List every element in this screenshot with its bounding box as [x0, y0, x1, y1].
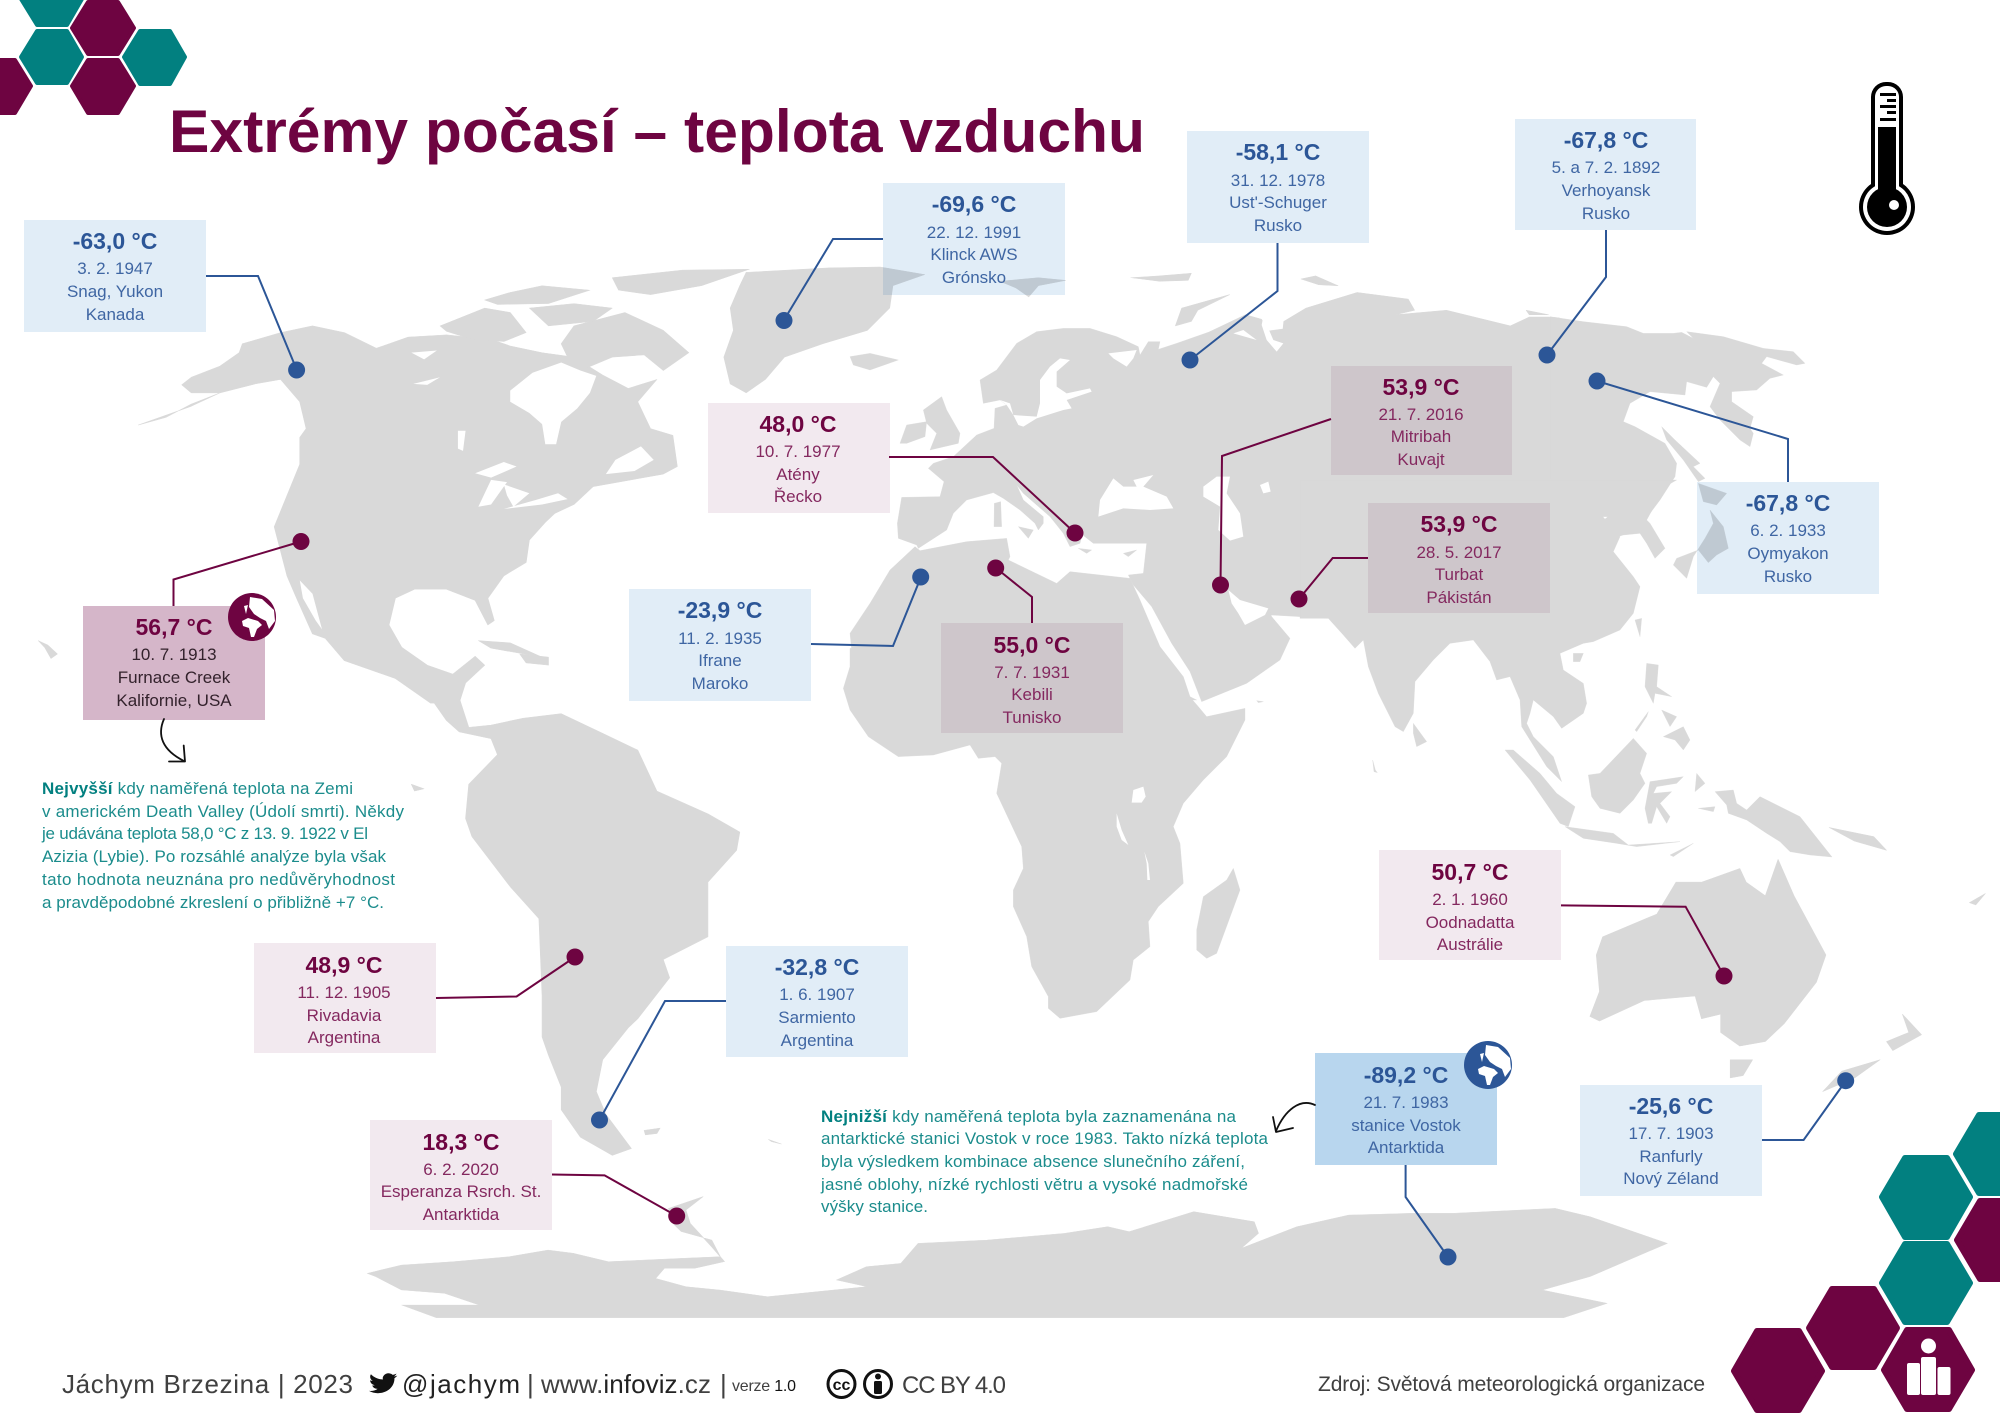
record: Ranfurly: Nový Zéland — [1623, 1169, 1719, 1188]
record: Sarmiento — [591, 946, 908, 1128]
record: Oymyakon: Oymyakon — [1747, 544, 1829, 563]
record: Kebili: 55,0 °C — [994, 632, 1070, 658]
record: Oymyakon: Rusko — [1764, 567, 1812, 586]
record: Turbat: 28. 5. 2017 — [1416, 543, 1502, 562]
record: Vostok (lowest): Antarktida — [1368, 1138, 1445, 1157]
record: Verhoyansk: 5. a 7. 2. 1892 — [1552, 158, 1660, 177]
record: Rivadavia — [254, 943, 584, 1053]
icon: person and bars — [1907, 1338, 1950, 1395]
text: highest temperature note: Azizia (Lybie). Po rozsáhlé analýze byla však — [42, 847, 386, 866]
record: Ranfurly: -25,6 °C — [1629, 1093, 1713, 1119]
record: Oymyakon: 6. 2. 1933 — [1750, 521, 1826, 540]
version: verze 1.0 — [732, 1378, 796, 1395]
record: Mitribah: Mitribah — [1391, 427, 1451, 446]
icon: globe blue — [1464, 1041, 1512, 1089]
record: Atény: 10. 7. 1977 — [755, 442, 841, 461]
record: Mitribah: Kuvajt — [1397, 450, 1445, 469]
record: Atény: Řecko — [774, 487, 822, 506]
record: Sarmiento: Sarmiento — [778, 1008, 856, 1027]
record: Kebili: Kebili — [1011, 685, 1053, 704]
record: Mitribah: 21. 7. 2016 — [1378, 405, 1464, 424]
title: Extrémy počasí – teplota vzduchu — [169, 98, 1145, 165]
record: Mitribah: 53,9 °C — [1383, 374, 1459, 400]
world map — [38, 267, 1985, 1318]
record: Rivadavia: 11. 12. 1905 — [297, 983, 391, 1002]
icon: globe maroon — [228, 593, 276, 641]
record: Ust'-Schuger: 31. 12. 1978 — [1231, 171, 1325, 190]
text: lowest temperature note: jasné oblohy, nízké rychlosti větru a vysoké nadmořské — [820, 1175, 1248, 1194]
record: Furnace Creek (highest) — [83, 533, 310, 720]
record: Atény — [708, 403, 1084, 542]
record: Turbat: 53,9 °C — [1421, 511, 1497, 537]
record: Furnace Creek (highest): 10. 7. 1913 — [131, 645, 217, 664]
record: Klinck AWS: -69,6 °C — [932, 191, 1016, 217]
record: Turbat: Turbat — [1435, 565, 1484, 584]
record: Ranfurly: 17. 7. 1903 — [1628, 1124, 1714, 1143]
record: Kebili — [941, 560, 1123, 733]
record: Oodnadatta: 50,7 °C — [1432, 859, 1508, 885]
arrow: highest note — [161, 719, 185, 762]
record: Ifrane: Ifrane — [698, 651, 742, 670]
record: Esperanza — [370, 1120, 685, 1230]
record: Oodnadatta: Oodnadatta — [1426, 913, 1515, 932]
record: Rivadavia: 48,9 °C — [306, 952, 382, 978]
record: Ifrane: 11. 2. 1935 — [678, 629, 762, 648]
record: Verhoyansk: Rusko — [1582, 204, 1630, 223]
text: lowest temperature note — [820, 1107, 1269, 1216]
record: Snag, Yukon: 3. 2. 1947 — [77, 259, 153, 278]
record: Vostok (lowest): -89,2 °C — [1364, 1062, 1448, 1088]
record: Turbat — [1290, 503, 1550, 613]
record: Turbat: Pákistán — [1426, 588, 1492, 607]
record: Klinck AWS: Grónsko — [942, 268, 1006, 287]
icon: cc — [828, 1370, 855, 1398]
text: highest temperature note: a pravděpodobné zkreslení o přibližně +7 °C. — [42, 893, 384, 912]
record: Oodnadatta: 2. 1. 1960 — [1432, 890, 1508, 909]
record: Ifrane — [629, 568, 929, 701]
record: Verhoyansk: Verhoyansk — [1562, 181, 1651, 200]
icon: thermometer — [1859, 82, 1915, 235]
licence: CC BY 4.0 — [902, 1372, 1006, 1399]
record: Verhoyansk — [1515, 119, 1696, 364]
source: Zdroj: Světová meteorologická organizace — [1318, 1373, 1705, 1396]
text: highest temperature note: tato hodnota neuznána pro nedůvěryhodnost — [42, 870, 395, 889]
record: Ust'-Schuger: Ust'-Schuger — [1229, 193, 1327, 212]
text: highest temperature note: Nejvyšší kdy naměřená teplota na Zemi — [42, 779, 353, 798]
website: www.infoviz.cz — [540, 1369, 711, 1399]
hexagons bottom-right — [1734, 1115, 2000, 1410]
icon: twitter — [369, 1373, 397, 1393]
record: Sarmiento: 1. 6. 1907 — [779, 985, 855, 1004]
record: Sarmiento: -32,8 °C — [775, 954, 859, 980]
record: Ust'-Schuger: Rusko — [1254, 216, 1302, 235]
record: Ifrane: Maroko — [692, 674, 748, 693]
handle: @jachym — [402, 1369, 520, 1399]
text: highest temperature note: v americkém Death Valley (Údolí smrti). Někdy — [42, 802, 404, 821]
record: Ranfurly — [1580, 1072, 1854, 1196]
record: Oodnadatta — [1379, 850, 1732, 984]
record: Ranfurly: Ranfurly — [1639, 1147, 1703, 1166]
record: Esperanza: Antarktida — [423, 1205, 500, 1224]
record: Oymyakon — [1588, 372, 1879, 594]
record: Mitribah — [1212, 366, 1512, 594]
separator and version: | — [720, 1369, 727, 1399]
record: Vostok (lowest): 21. 7. 1983 — [1363, 1093, 1449, 1112]
record: Snag, Yukon: -63,0 °C — [73, 228, 157, 254]
arrow: lowest note — [1273, 1103, 1315, 1132]
record: Rivadavia: Argentina — [308, 1028, 381, 1047]
record: Furnace Creek (highest): 56,7 °C — [136, 614, 212, 640]
record: Snag, Yukon: Snag, Yukon — [67, 282, 163, 301]
record: Klinck AWS: Klinck AWS — [930, 245, 1018, 264]
text: lowest temperature note: byla výsledkem kombinace absence slunečního záření, — [821, 1152, 1245, 1171]
record: Snag, Yukon: Kanada — [86, 305, 145, 324]
record: Atény: 48,0 °C — [760, 411, 836, 437]
text: lowest temperature note: výšky stanice. — [821, 1197, 928, 1216]
record: Atény: Atény — [776, 465, 820, 484]
text: lowest temperature note: antarktické stanici Vostok v roce 1983. Takto nízká teplota — [821, 1129, 1269, 1148]
record: Kebili: 7. 7. 1931 — [994, 663, 1070, 682]
author: Jáchym Brzezina | 2023 — [62, 1369, 353, 1399]
record: Rivadavia: Rivadavia — [307, 1006, 382, 1025]
record: Klinck AWS — [776, 183, 1065, 329]
record: Verhoyansk: -67,8 °C — [1564, 127, 1648, 153]
record: Vostok (lowest): stanice Vostok — [1351, 1116, 1461, 1135]
icon: by — [864, 1370, 892, 1398]
record: Esperanza: Esperanza Rsrch. St. — [381, 1182, 541, 1201]
record: Ust'-Schuger — [1182, 131, 1369, 368]
text: lowest temperature note: Nejnižší kdy naměřená teplota byla zaznamenána na — [821, 1107, 1237, 1126]
text: highest temperature note: je udávána teplota 58,0 °C z 13. 9. 1922 v El — [41, 824, 368, 843]
text: highest temperature note — [41, 779, 404, 912]
record: Kebili: Tunisko — [1003, 708, 1061, 727]
record: Vostok (lowest) — [1315, 1053, 1497, 1266]
separator and web: | — [527, 1369, 534, 1399]
icon: cc: cc — [833, 1377, 850, 1394]
record: Ust'-Schuger: -58,1 °C — [1236, 139, 1320, 165]
record: Esperanza: 6. 2. 2020 — [423, 1160, 499, 1179]
record: Sarmiento: Argentina — [781, 1031, 854, 1050]
record: Furnace Creek (highest): Furnace Creek — [118, 668, 231, 687]
record: Oymyakon: -67,8 °C — [1746, 490, 1830, 516]
record: Oodnadatta: Austrálie — [1437, 935, 1503, 954]
record: Furnace Creek (highest): Kalifornie, USA — [116, 691, 232, 710]
record: Snag, Yukon — [24, 220, 305, 378]
record: Klinck AWS: 22. 12. 1991 — [927, 223, 1021, 242]
record: Esperanza: 18,3 °C — [423, 1129, 499, 1155]
hexagons top-left — [0, 0, 185, 113]
record: Ifrane: -23,9 °C — [678, 597, 762, 623]
footer — [62, 1369, 1705, 1399]
